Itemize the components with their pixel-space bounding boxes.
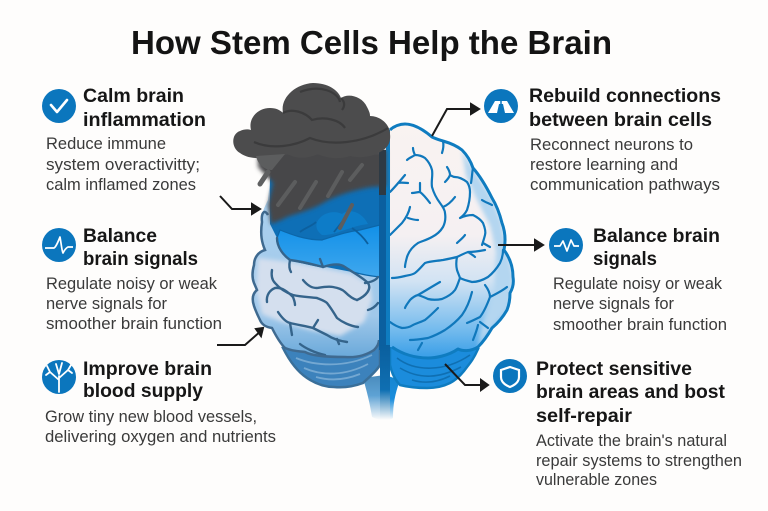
left hemisphere — [251, 175, 379, 358]
description: repair systems to strengthen — [536, 452, 742, 470]
description: Regulate noisy or weak — [553, 275, 723, 293]
heading: Balance — [83, 225, 157, 247]
cerebellum right — [390, 340, 478, 388]
cerebellum left — [283, 340, 380, 387]
icon: shield — [493, 359, 527, 393]
arrow: balance signals right — [498, 240, 543, 250]
rain drop — [260, 172, 268, 184]
heading: Calm brain — [83, 85, 184, 107]
icon: check — [42, 89, 76, 123]
item: improve blood supply — [42, 358, 276, 446]
heading: signals — [593, 248, 657, 270]
item: calm brain inflammation — [42, 85, 206, 194]
right outer shading — [462, 150, 513, 347]
description: smoother brain function — [46, 315, 222, 333]
description: delivering oxygen and nutrients — [45, 428, 276, 446]
heading: brain areas and bost — [536, 381, 725, 403]
heading: inflammation — [83, 109, 206, 131]
arrow: protect — [445, 364, 488, 390]
heading: self-repair — [536, 405, 632, 427]
description: smoother brain function — [553, 316, 727, 334]
arrow: blood supply — [217, 328, 263, 345]
left bright blue folds — [277, 225, 380, 277]
right sulci — [390, 141, 507, 350]
brain stem — [363, 375, 400, 420]
icon: synapse bridge — [484, 89, 518, 123]
item: balance brain signals left — [42, 225, 222, 333]
description: Reconnect neurons to — [530, 136, 693, 154]
item: protect sensitive areas — [493, 358, 742, 489]
icon: pulse — [549, 228, 583, 262]
storm cloud — [233, 83, 390, 184]
description: system overactivitty; — [46, 156, 200, 174]
left sulci — [267, 238, 378, 355]
left dark blue band — [270, 176, 379, 272]
description: nerve signals for — [553, 295, 675, 313]
heading: brain signals — [83, 248, 198, 270]
heading: Protect sensitive — [536, 358, 692, 380]
heading: Rebuild connections — [529, 85, 721, 107]
heading: Balance brain — [593, 225, 720, 247]
description: Regulate noisy or weak — [46, 275, 218, 293]
icon: pulse — [42, 228, 76, 262]
dark storm haze — [258, 150, 386, 228]
description: communication pathways — [530, 176, 720, 194]
arrow: rebuild connections — [432, 104, 479, 136]
heading: Improve brain — [83, 358, 212, 380]
icon: vessel tree — [42, 360, 76, 394]
description: Activate the brain's natural — [536, 432, 727, 450]
heading: between brain cells — [529, 109, 712, 131]
description: restore learning and — [530, 156, 678, 174]
item: rebuild connections — [484, 85, 721, 194]
brain illustration — [233, 83, 518, 421]
arrow: calm inflammation — [220, 196, 260, 214]
left upper sulci — [300, 218, 368, 244]
heading: blood supply — [83, 380, 203, 402]
description: nerve signals for — [46, 295, 168, 313]
description: Grow tiny new blood vessels, — [45, 408, 257, 426]
description: calm inflamed zones — [46, 176, 196, 194]
description: Reduce immune — [46, 135, 166, 153]
left pale lobes — [256, 258, 372, 336]
central fissure — [379, 130, 390, 421]
item: balance brain signals right — [549, 225, 727, 334]
right hemisphere — [388, 120, 518, 360]
title: How Stem Cells Help the Brain — [131, 24, 612, 61]
description: vulnerable zones — [536, 471, 657, 489]
